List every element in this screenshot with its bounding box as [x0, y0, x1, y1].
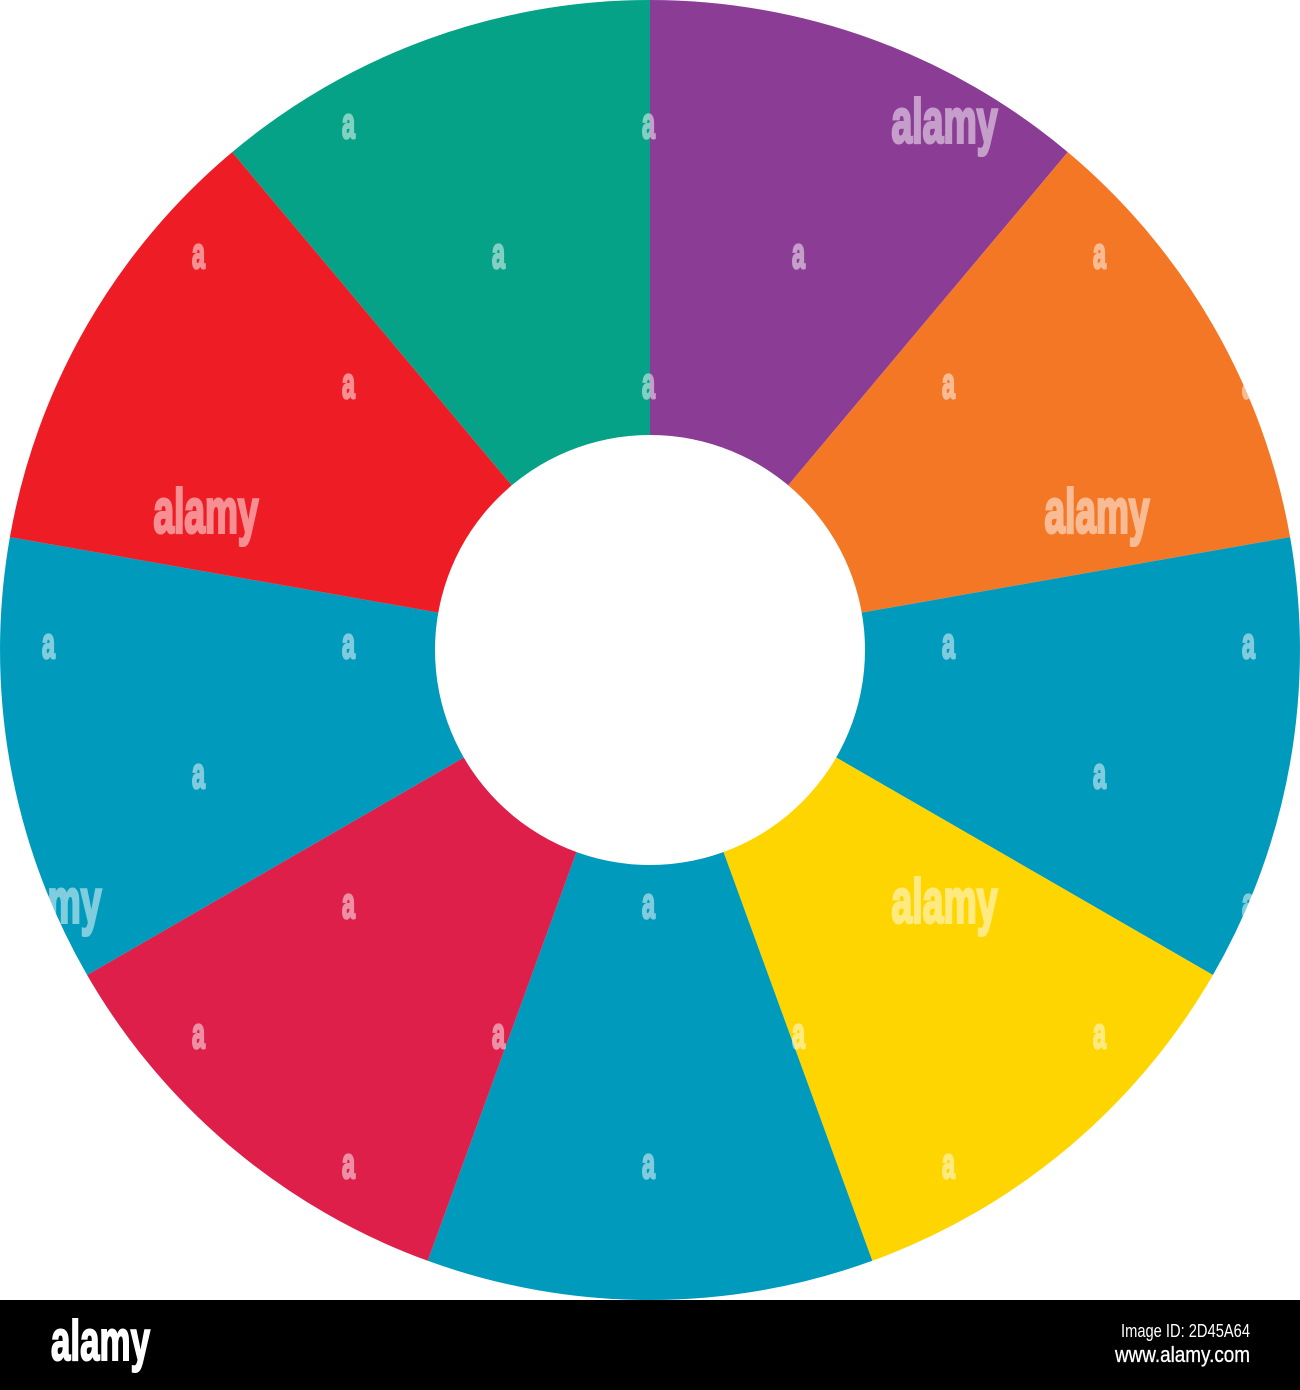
segment: green	[232, 0, 650, 650]
watermark: small letters: a	[492, 1009, 505, 1058]
segment: blue bottom	[428, 650, 872, 1300]
watermark: small letters: a	[342, 99, 355, 148]
segment: red	[10, 152, 650, 650]
watermark: small letters: a	[1093, 1009, 1106, 1058]
watermark: large words: alamy	[154, 478, 259, 546]
watermark: small letters: a	[492, 229, 505, 278]
watermark: small letters: a	[342, 879, 355, 928]
watermark: small letters: a	[942, 619, 955, 668]
watermark: large words: alamy	[892, 88, 998, 156]
watermark: small letters: a	[192, 229, 205, 278]
watermark: small letters: a	[642, 99, 655, 148]
website url: www.alamy.com	[1114, 1342, 1250, 1367]
watermark: small letters: a	[642, 359, 655, 408]
watermark: small letters: a	[642, 879, 655, 928]
watermark: small letters: a	[342, 359, 355, 408]
watermark: small letters: a	[192, 1009, 205, 1058]
footer logo: alamy	[51, 1309, 150, 1373]
watermark: small letters: a	[1242, 879, 1255, 928]
segment: blue right	[650, 537, 1300, 975]
watermark: small letters: a	[1093, 229, 1106, 278]
watermark: large words	[0, 88, 1150, 936]
segment: orange	[650, 152, 1290, 650]
watermark: small letters: a	[792, 1009, 805, 1058]
watermark: small letters: a	[192, 749, 205, 798]
watermark: small letters: a	[1093, 749, 1106, 798]
watermark: small letters: a	[942, 1139, 955, 1188]
watermark: small letters: a	[792, 229, 805, 278]
footer bar	[0, 1300, 1300, 1390]
image id: Image ID: 2D45A64	[1121, 1321, 1250, 1341]
watermark overlay	[0, 88, 1255, 1188]
watermark: small letters: a	[942, 359, 955, 408]
watermark: small letters: a	[342, 619, 355, 668]
watermark: small letters: a	[342, 1139, 355, 1188]
watermark: small letters: a	[1242, 359, 1255, 408]
watermark: small letters: a	[642, 1139, 655, 1188]
watermark: small letters: a	[42, 619, 55, 668]
segment: purple	[650, 0, 1068, 650]
watermark: small letters	[42, 99, 1255, 1188]
watermark: large words: alamy	[1044, 478, 1150, 546]
watermark: small letters: a	[1242, 619, 1255, 668]
segment: yellow	[650, 650, 1213, 1261]
segment: blue left	[0, 537, 650, 975]
center hole	[435, 435, 865, 865]
watermark: large words: alamy	[0, 868, 102, 936]
watermark: large words: alamy	[892, 868, 998, 936]
segment: crimson	[87, 650, 650, 1261]
